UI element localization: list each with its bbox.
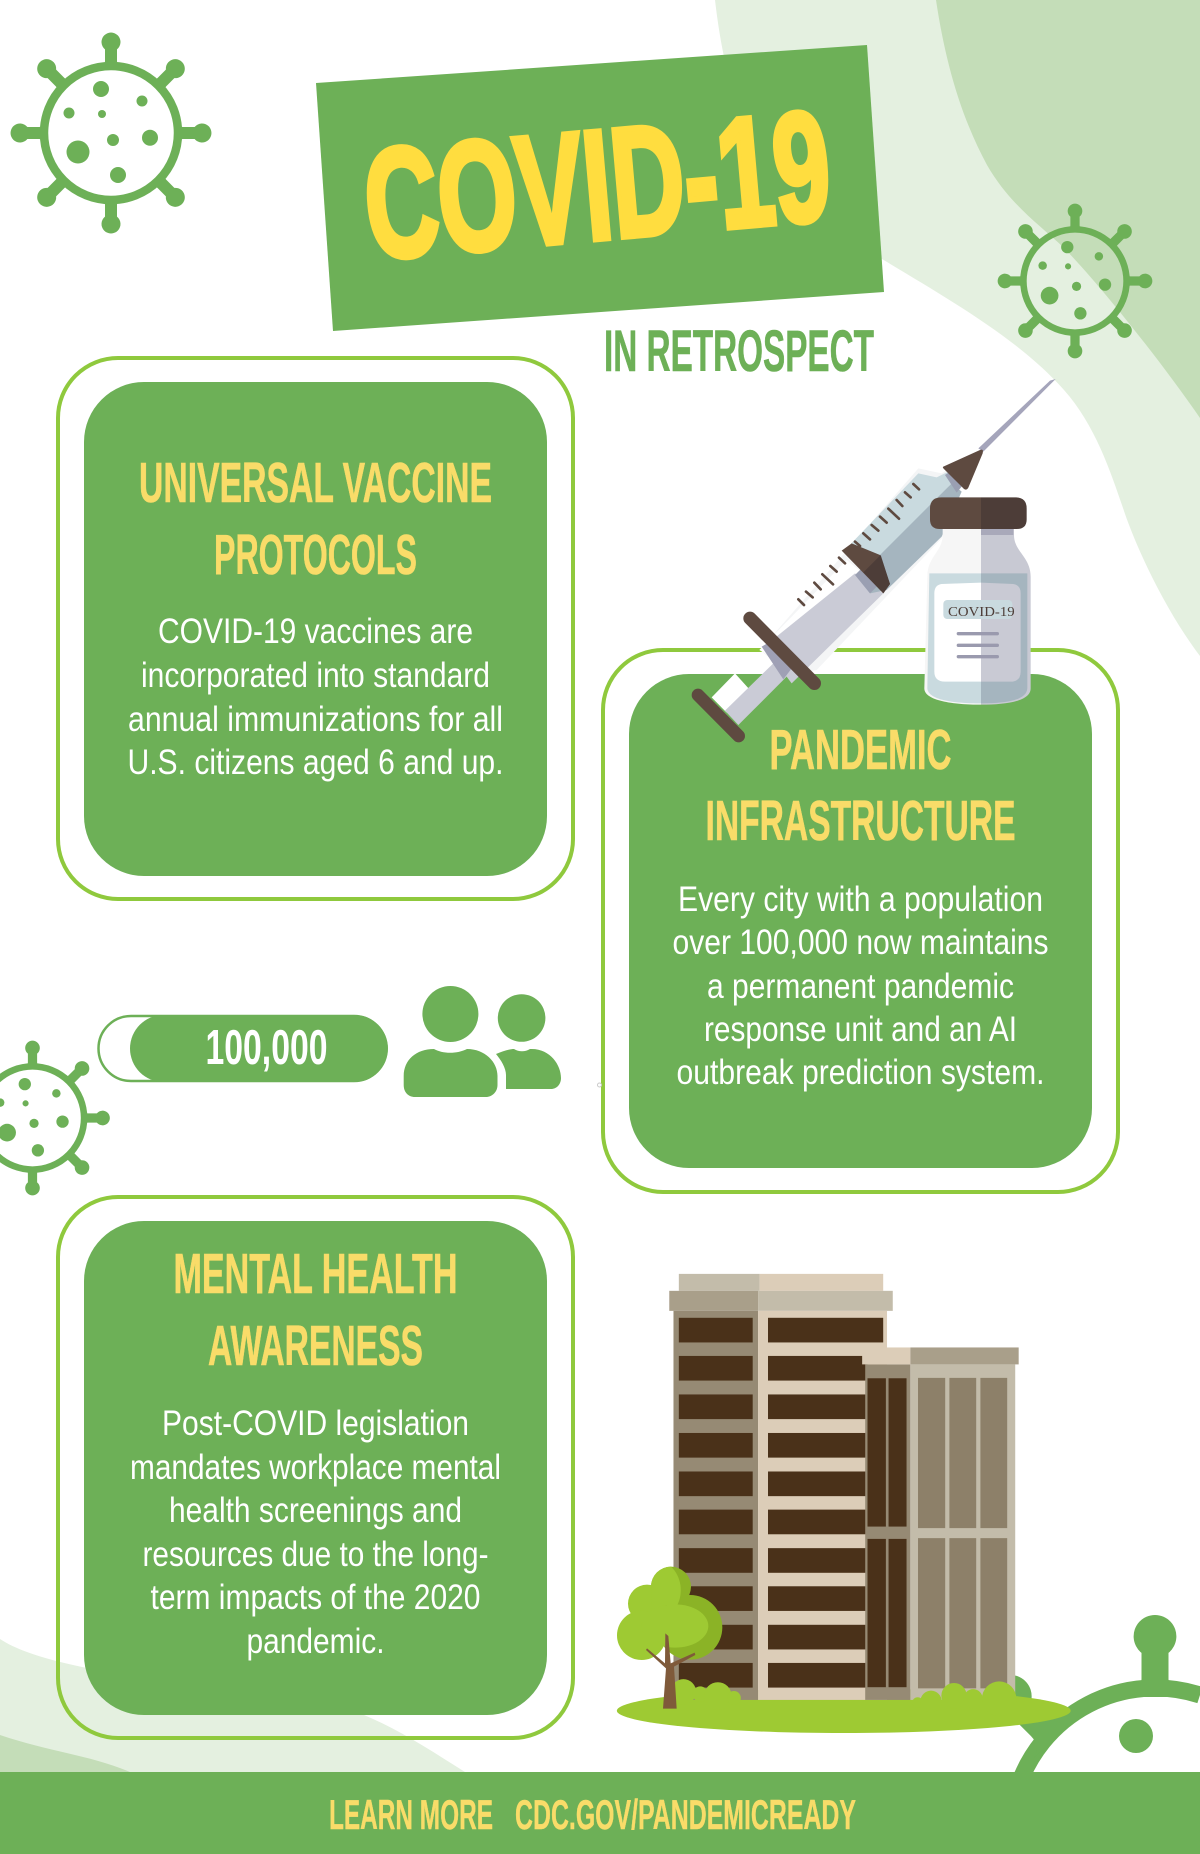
- heading: [139, 451, 492, 587]
- liquid left: [927, 573, 981, 703]
- illustration: buildings and grounds: [617, 1274, 1071, 1733]
- body text: COVID-19 vaccines are: [158, 612, 473, 651]
- panel outline: [58, 358, 573, 899]
- plunger head dark: [863, 555, 890, 593]
- thumb rest: [698, 695, 739, 736]
- banner background: [316, 45, 884, 331]
- heading: MENTAL HEALTH: [174, 1242, 458, 1306]
- heading: AWARENESS: [208, 1314, 423, 1378]
- cap right: [981, 497, 1027, 529]
- body text: outbreak prediction system.: [676, 1053, 1044, 1092]
- hub shadow: [945, 472, 962, 493]
- panel fill: [84, 1221, 547, 1715]
- tower roof: [679, 1274, 760, 1291]
- footer text: [329, 1791, 856, 1838]
- pill fill: [130, 1015, 388, 1082]
- subtitle: IN RETROSPECT: [604, 319, 874, 384]
- body text: incorporated into standard: [141, 656, 490, 695]
- illustration: tree: [617, 1567, 722, 1709]
- plunger grey: [764, 573, 883, 683]
- barrel dark half: [857, 483, 962, 593]
- tower windows: [679, 1318, 883, 1688]
- body text: pandemic.: [246, 1622, 384, 1661]
- tower body: [673, 1311, 758, 1700]
- panel outline: [58, 1197, 573, 1738]
- label left: [934, 583, 981, 682]
- body text: [128, 612, 504, 782]
- pill outline: [98, 1016, 386, 1081]
- heading: UNIVERSAL VACCINE: [139, 451, 492, 515]
- panel: pandemic infrastructure: [603, 650, 1118, 1192]
- background blob: light top right: [715, 0, 1200, 656]
- body text: Post-COVID legislation: [162, 1404, 469, 1443]
- upper barrel halo: [760, 468, 960, 675]
- label lines: [958, 634, 997, 657]
- icon: virus left middle: [0, 1041, 110, 1195]
- lower plunger white: [712, 673, 750, 713]
- body text: resources due to the long-: [142, 1535, 488, 1574]
- body text: U.S. citizens aged 6 and up.: [128, 743, 504, 782]
- background blob: dark top right: [936, 0, 1200, 418]
- second building windows: [868, 1378, 907, 1687]
- tiny marker: [598, 1083, 602, 1087]
- footer bar: [0, 1772, 1200, 1854]
- hub: [943, 450, 983, 490]
- icon: virus top left: [11, 33, 211, 233]
- title banner: [316, 45, 884, 331]
- plunger head: [842, 543, 890, 593]
- barrel shadow: [855, 563, 885, 593]
- background blob: light bottom left: [0, 1639, 465, 1772]
- icon: virus bottom right: [976, 1615, 1200, 1790]
- icon: people: [404, 986, 561, 1097]
- barrel light half: [845, 472, 953, 563]
- tree trunk: [646, 1633, 695, 1709]
- flange: [750, 618, 814, 683]
- panel: universal vaccine protocols: [58, 358, 573, 899]
- body text: annual immunizations for all: [128, 700, 503, 739]
- icon: virus top right: [998, 204, 1152, 358]
- body text: Every city with a population: [678, 880, 1043, 919]
- label tag: [943, 600, 1012, 619]
- tree foliage dark: [651, 1567, 722, 1660]
- cap left: [930, 497, 981, 529]
- title text: COVID-19: [358, 79, 837, 293]
- meadow: [617, 1688, 1071, 1733]
- panel fill: [84, 382, 547, 876]
- body text: mandates workplace mental: [130, 1448, 501, 1487]
- label right: [981, 583, 1021, 682]
- footer text: LEARN MORE: [329, 1791, 493, 1838]
- needle: [978, 379, 1056, 452]
- lower plunger grey: [725, 663, 787, 725]
- illustration: syringe: [698, 379, 1056, 736]
- body text: [130, 1404, 501, 1661]
- background blob: dark bottom left: [0, 1735, 130, 1772]
- vial right half: [981, 528, 1031, 705]
- cap neck shadow: [981, 528, 1013, 535]
- body text: [672, 880, 1048, 1092]
- body text: health screenings and: [169, 1491, 462, 1530]
- body text: over 100,000 now maintains: [672, 923, 1048, 962]
- pill number: 100,000: [206, 1021, 328, 1075]
- vial left half: [924, 528, 981, 705]
- plunger white: [759, 560, 867, 662]
- heading: [174, 1242, 458, 1378]
- footer text: CDC.GOV/PANDEMICREADY: [515, 1791, 856, 1838]
- body text: a permanent pandemic: [707, 967, 1014, 1006]
- heading: PROTOCOLS: [214, 523, 417, 587]
- bushes: [671, 1679, 1016, 1716]
- stat pill: 100,000: [98, 1015, 388, 1082]
- vial label text: COVID-19: [948, 605, 1015, 620]
- heading: [706, 718, 1016, 853]
- panel fill: [629, 674, 1092, 1168]
- panel outline: [603, 650, 1118, 1192]
- body text: response unit and an AI: [704, 1010, 1017, 1049]
- body text: term impacts of the 2020: [150, 1578, 480, 1617]
- collar: [762, 642, 792, 679]
- panel: mental health awareness: [58, 1197, 573, 1738]
- illustration: vaccine vial: [924, 497, 1031, 705]
- second building: [865, 1364, 910, 1700]
- heading: PANDEMIC: [770, 718, 952, 782]
- tree foliage light: [617, 1567, 708, 1660]
- ticks: [798, 484, 919, 605]
- liquid right: [981, 573, 1027, 703]
